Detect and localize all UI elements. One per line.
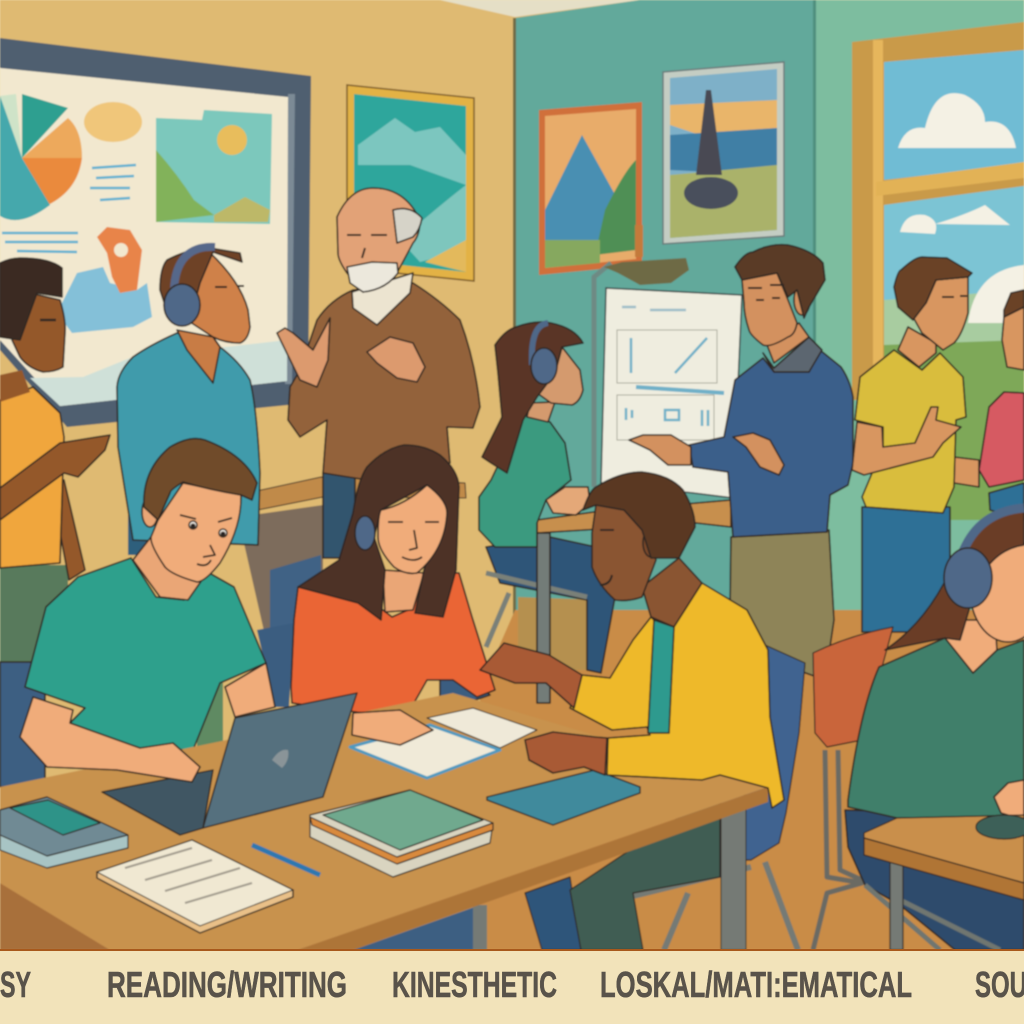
label: reading and writing: READING/WRITING [107,964,347,1005]
hand of student in orange sweater [352,710,433,745]
stack of books left [0,797,128,868]
student with headphones in blue shirt [117,247,260,555]
window [852,22,1024,520]
poster: mountain and forest [539,102,642,275]
student in navy sweater [629,245,853,680]
map icon on board [57,227,152,333]
student in yellow shirt [852,257,979,632]
blue notebook [487,770,640,825]
pie chart [0,94,82,220]
arm of student in teal t-shirt [20,663,275,782]
student left in orange shirt [0,258,110,663]
back desk and cabinet [238,477,466,707]
student in teal t-shirt [0,439,266,787]
clouds [898,93,1024,323]
blue chair and legs of yellow cardigan student [525,645,805,950]
pen [252,845,320,875]
label: kinesthetic: KINESTHETIC [392,964,557,1005]
open papers [350,708,537,778]
student with headphones in green sweater [845,505,1024,950]
whiteboard with charts [0,38,311,427]
student with headphones in green shirt [479,322,731,703]
front table [0,693,768,950]
label strip [0,949,1024,1024]
orange chair [813,627,893,950]
right desk [864,815,1024,950]
teacher in brown sweater [277,188,480,558]
poster: teal mountains [347,85,474,281]
flip chart with graphs [594,225,742,498]
student in orange sweater [291,445,495,713]
student in yellow cardigan [480,472,784,808]
poster: tower landscape [663,62,784,244]
label: sensory fragment: SY [0,964,31,1005]
laptop [102,693,357,835]
paper sheet [97,840,293,933]
landscape sketch on board [156,110,272,224]
green book stack [310,790,493,877]
student in pink shirt [979,290,1024,520]
